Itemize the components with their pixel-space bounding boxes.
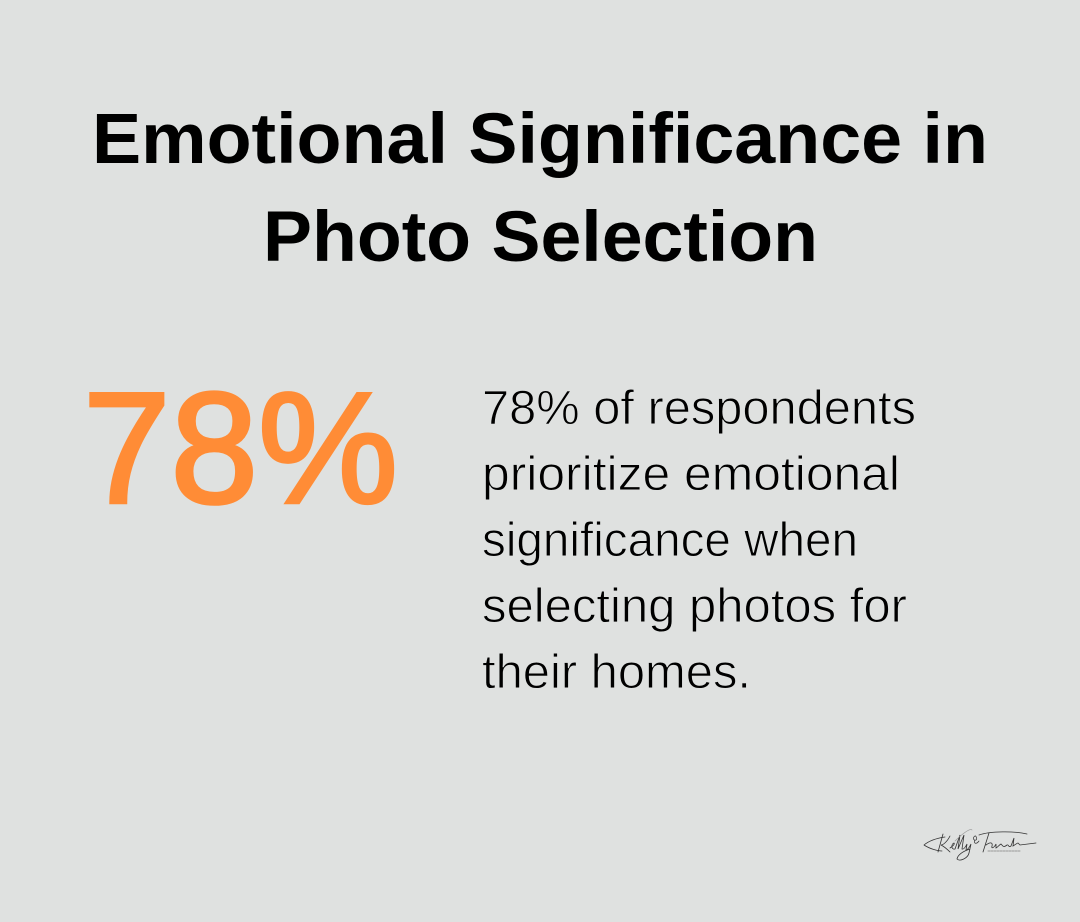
description text: 78% of respondents xyxy=(482,382,916,435)
description text: significance when xyxy=(482,514,858,567)
title xyxy=(92,100,988,277)
big statistic: 78%: 78% xyxy=(83,360,398,536)
description text xyxy=(482,382,916,699)
description text: selecting photos for xyxy=(482,580,907,633)
description text: prioritize emotional xyxy=(482,448,900,501)
description text: their homes. xyxy=(482,646,751,699)
title: Emotional Significance in xyxy=(92,100,988,179)
icon: photographer signature logo xyxy=(924,830,1036,860)
title: Photo Selection xyxy=(263,198,818,277)
